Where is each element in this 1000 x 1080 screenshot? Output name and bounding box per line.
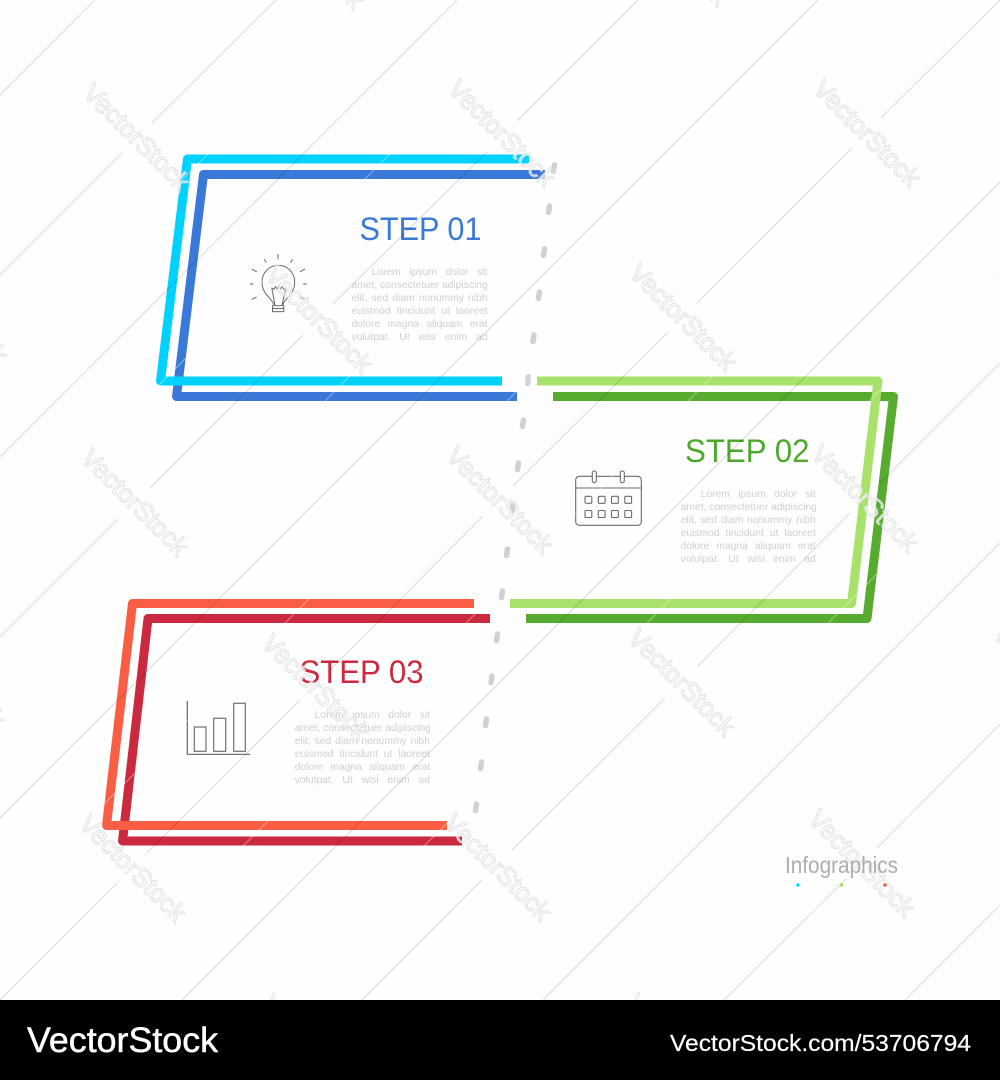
text block: step 03: Lorem ipsum dolor sit	[315, 710, 430, 721]
frame: step 03	[106, 604, 490, 841]
panel: step 03	[106, 604, 490, 841]
text block: step 03	[295, 710, 430, 790]
footer url text: VectorStock.com/53706794	[670, 1030, 971, 1056]
watermark: repeated VectorStock text: VectorStock	[73, 808, 193, 928]
text block: step 01: amet, consectetuer adipiscing	[352, 280, 488, 291]
text block: step 01: Lorem ipsum dolor sit	[372, 267, 488, 278]
panel: step 02	[510, 381, 894, 618]
text block: step 03: elit, sed diam nonummy nibh	[295, 736, 430, 747]
watermark: repeated VectorStock text: VectorStock	[623, 257, 743, 377]
heading: step 03: STEP 03	[300, 654, 424, 690]
caption: Infographics	[785, 852, 898, 887]
text block: step 02: elit, sed diam nonummy nibh	[681, 515, 816, 526]
footer logo text: VectorStock	[27, 1021, 219, 1060]
dashed divider	[476, 165, 554, 810]
heading: step 02: STEP 02	[685, 433, 810, 469]
panel: step 01	[160, 159, 545, 396]
text block: step 02: Lorem ipsum dolor sit	[701, 489, 816, 500]
text block: step 02: euismod tincidunt ut laoreet	[681, 528, 816, 539]
watermark: repeated VectorStock text: VectorStock	[77, 77, 197, 197]
watermark: repeated VectorStock text: VectorStock	[442, 73, 562, 193]
watermark: repeated VectorStock text: VectorStock	[438, 807, 558, 927]
icon: bar chart	[187, 701, 250, 754]
text block: step 03: amet, consectetuer adipiscing	[295, 723, 430, 734]
text block: step 01	[352, 267, 488, 347]
caption: Infographics: Infographics	[785, 852, 898, 878]
watermark: repeated VectorStock text: VectorStock	[75, 442, 195, 562]
text block: step 02: dolore magna aliquam erat	[681, 541, 816, 552]
icon: light bulb	[250, 254, 307, 312]
watermark: repeated VectorStock text: VectorStock	[256, 627, 376, 747]
frame: step 02	[510, 381, 894, 618]
text block: step 02	[681, 489, 816, 569]
icon: calendar	[576, 471, 641, 525]
text block: step 03: dolore magna aliquam erat	[295, 762, 430, 773]
text block: step 01: volutpat. Ut wisi enim ad	[352, 332, 488, 343]
footer bar	[0, 1000, 1000, 1080]
watermark: repeated VectorStock text: VectorStock	[807, 73, 927, 193]
watermark: repeated VectorStock text: VectorStock	[622, 622, 742, 742]
text block: step 02: amet, consectetuer adipiscing	[681, 502, 816, 513]
text block: step 01: dolore magna aliquam erat	[352, 319, 488, 330]
text block: step 02: volutpat. Ut wisi enim ad	[681, 554, 816, 565]
watermark: repeated VectorStock text: VectorStock	[259, 259, 379, 379]
text block: step 01: elit, sed diam nonummy nibh	[352, 293, 488, 304]
text block: step 01: euismod tincidunt ut laoreet	[352, 306, 488, 317]
frame: step 01	[160, 159, 545, 396]
watermark: repeated VectorStock text: VectorStock	[802, 803, 922, 923]
watermark: repeated VectorStock text: VectorStock	[805, 438, 925, 558]
heading: step 01: STEP 01	[360, 211, 482, 247]
text block: step 03: volutpat. Ut wisi enim ad	[295, 775, 430, 786]
text block: step 03: euismod tincidunt ut laoreet	[295, 749, 430, 760]
watermark: repeated VectorStock text: VectorStock	[440, 440, 560, 560]
